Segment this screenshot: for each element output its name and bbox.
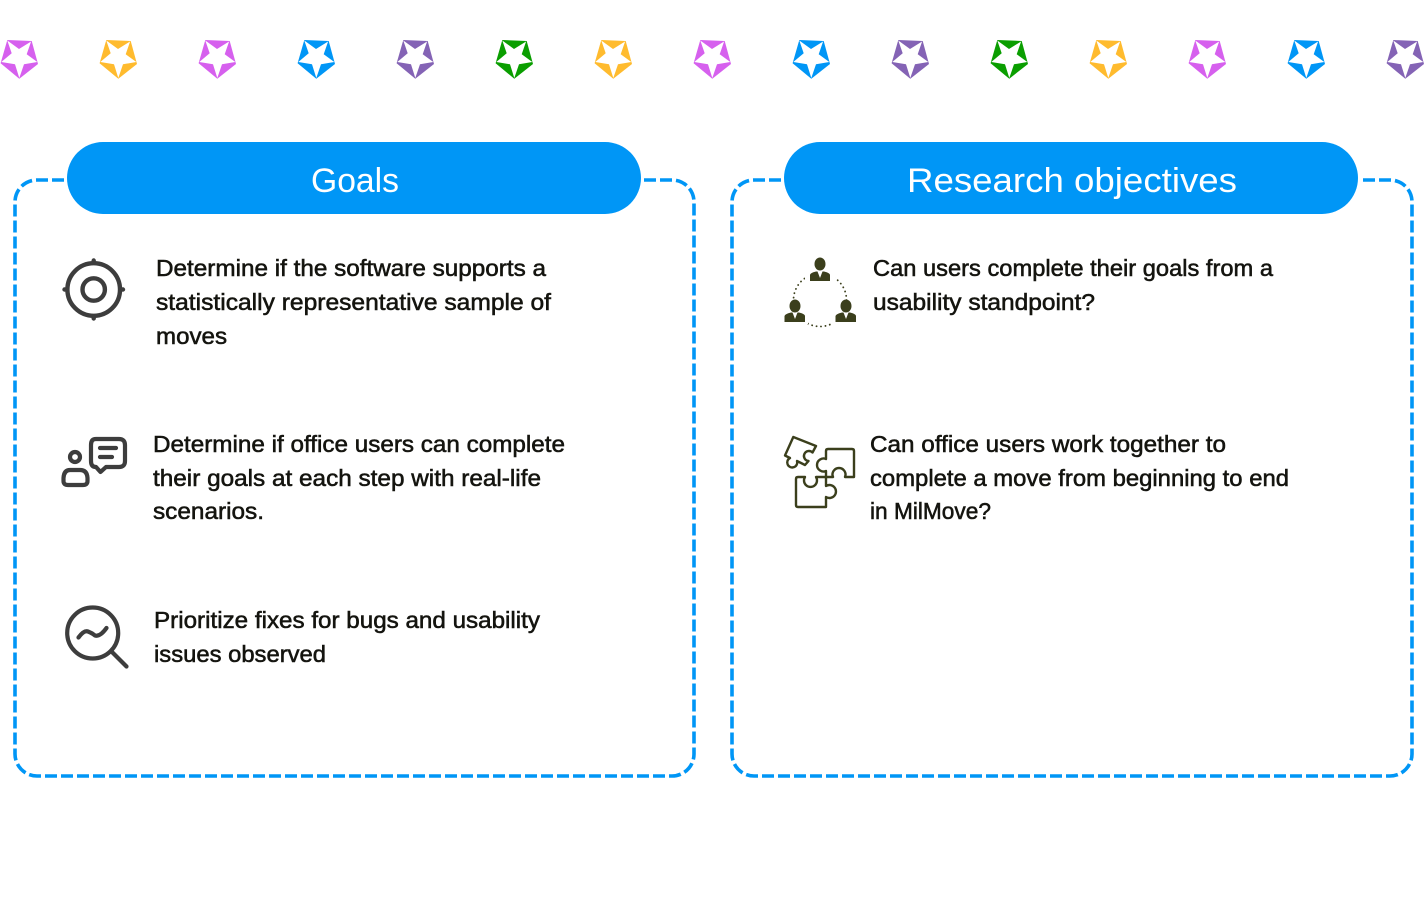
goal 2 text: Determine if office users can complete <box>153 431 565 457</box>
star 1 <box>1 40 38 79</box>
star 5 <box>397 40 434 79</box>
star 10 <box>892 40 929 79</box>
star 9 <box>793 40 830 79</box>
icon: magnifier with trend <box>67 608 126 666</box>
star 12 <box>1090 40 1127 79</box>
goal 1 text: Determine if the software supports a <box>156 255 546 281</box>
goals heading: Goals <box>311 162 399 200</box>
star 7 <box>595 40 632 79</box>
icon: person with speech bubble <box>64 439 125 485</box>
star 4 <box>298 40 335 79</box>
star 11 <box>991 40 1028 79</box>
objectives heading <box>784 142 1358 214</box>
goal 1 text <box>156 255 552 349</box>
goal 2 text: scenarios. <box>153 498 264 524</box>
objective 1 text <box>873 255 1273 315</box>
star 15 <box>1387 40 1424 79</box>
goal 3 text <box>154 607 541 667</box>
objective 2 text <box>870 431 1289 524</box>
goal 2 text <box>153 431 565 524</box>
objective 1 text: Can users complete their goals from a <box>873 255 1273 281</box>
objective 2 text: complete a move from beginning to end <box>870 465 1289 491</box>
goal 1 text: statistically representative sample of <box>156 289 552 315</box>
star 13 <box>1189 40 1226 79</box>
goal 1 text: moves <box>156 323 227 349</box>
panel: goals <box>15 142 694 776</box>
goals heading <box>67 142 641 214</box>
panel: research objectives <box>732 142 1412 776</box>
objectives dashed border <box>732 180 1412 776</box>
icon: target <box>64 260 123 318</box>
star 8 <box>694 40 731 79</box>
goals dashed border <box>15 180 694 776</box>
star 6 <box>496 40 533 79</box>
star 14 <box>1288 40 1325 79</box>
objectives heading: Research objectives <box>907 162 1237 200</box>
star row <box>1 40 1424 79</box>
star 3 <box>199 40 236 79</box>
objective 2 text: in MilMove? <box>870 498 991 524</box>
icon: puzzle pieces <box>785 437 854 507</box>
star 2 <box>100 40 137 79</box>
goal 3 text: Prioritize fixes for bugs and usability <box>154 607 541 633</box>
objective 1 text: usability standpoint? <box>873 289 1095 315</box>
goal 3 text: issues observed <box>154 641 326 667</box>
goal 2 text: their goals at each step with real-life <box>153 465 541 491</box>
icon: connected people <box>781 258 859 326</box>
objective 2 text: Can office users work together to <box>870 431 1226 457</box>
